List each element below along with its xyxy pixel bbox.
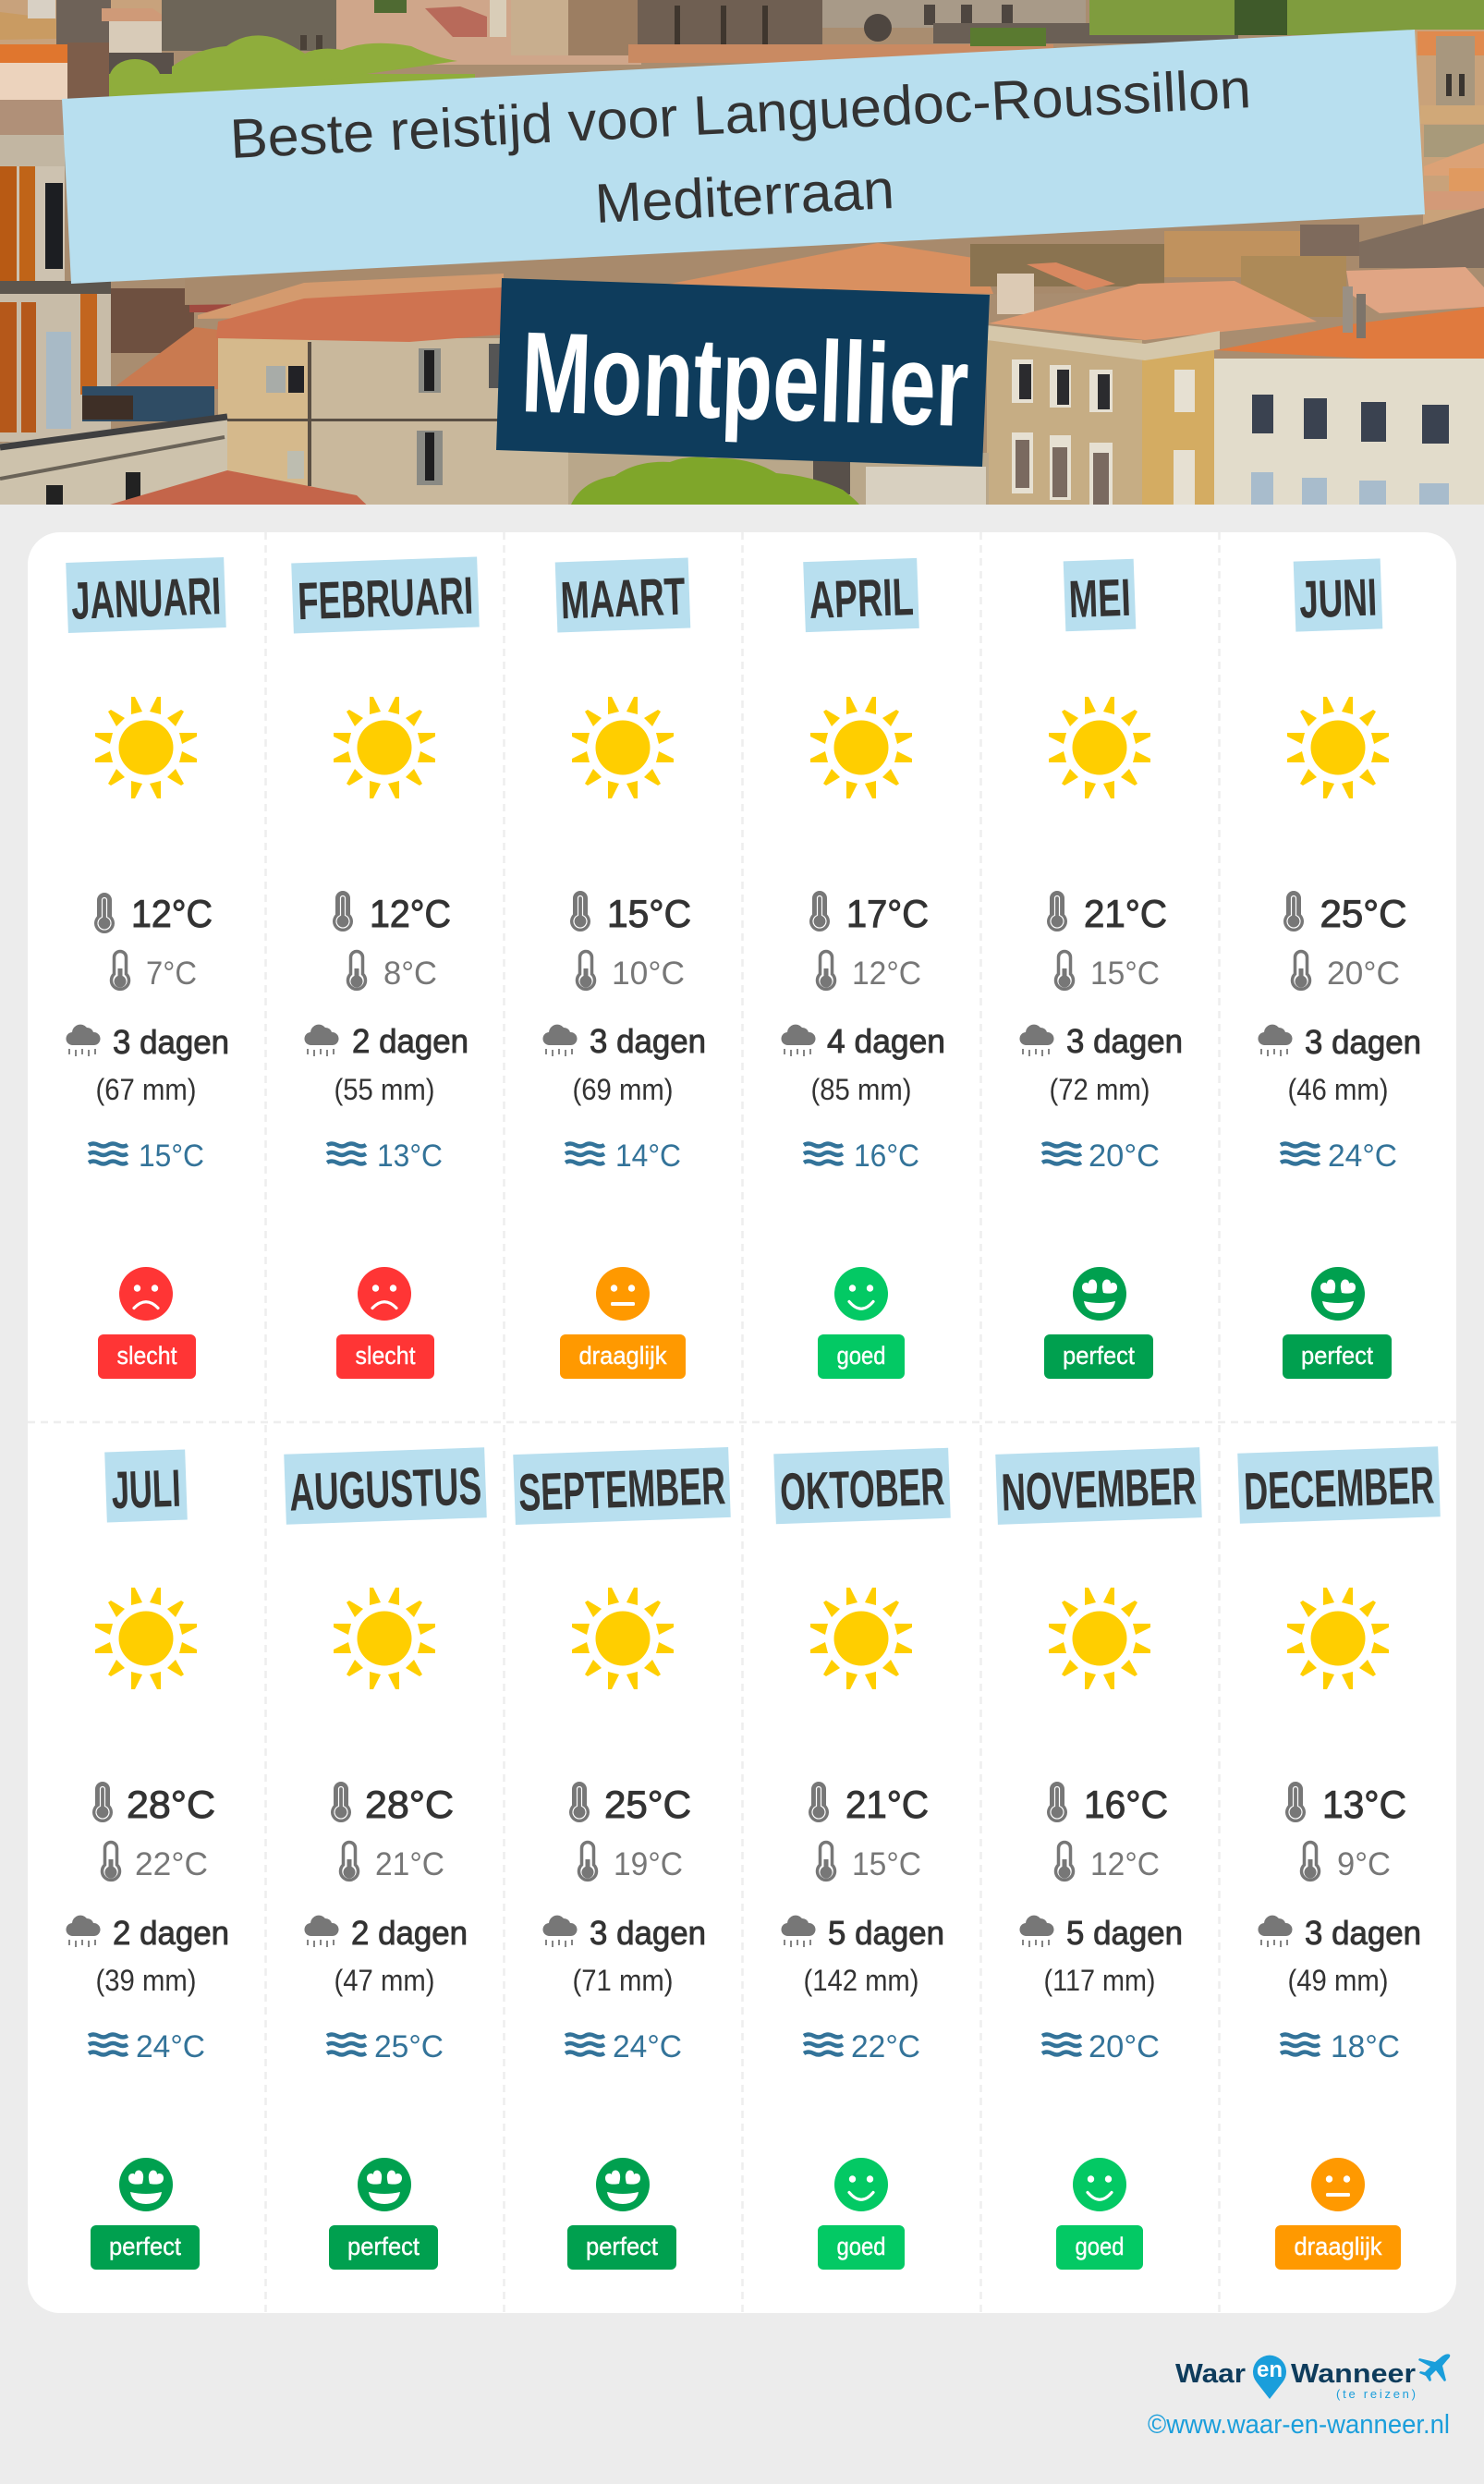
month heading: FEBRUARI [297, 566, 474, 631]
icon: thermometer low [577, 952, 595, 989]
icon: rating face [1311, 2158, 1365, 2211]
sea temperature: 15°C [139, 1138, 204, 1174]
min temperature: 15°C [852, 1846, 921, 1882]
icon: thermometer high [331, 1782, 351, 1822]
rainfall: (69 mm) [573, 1073, 673, 1106]
rating badge: perfect [1301, 1342, 1373, 1370]
icon: thermometer high [92, 1782, 113, 1822]
rating badge: slecht [116, 1342, 177, 1370]
icon: sun [810, 1588, 912, 1689]
icon: waves [1281, 1144, 1320, 1164]
icon: thermometer low [340, 1843, 359, 1880]
sea temperature: 13°C [377, 1138, 443, 1174]
logo: Waar en Wanneer [1175, 2354, 1450, 2401]
website url: ©www.waar-en-wanneer.nl [1148, 2410, 1450, 2440]
month panel: juli [66, 1450, 229, 2270]
icon: sun [572, 1588, 674, 1689]
rating badge: perfect [347, 2233, 420, 2260]
icon: thermometer high [1285, 1782, 1306, 1822]
month heading [513, 1447, 731, 1525]
month panel: oktober [773, 1448, 951, 2270]
rainfall: (142 mm) [804, 1964, 918, 1997]
month heading: SEPTEMBER [517, 1456, 726, 1523]
month panel: september [513, 1447, 731, 2270]
max temperature: 12°C [131, 892, 213, 935]
rating badge [818, 2225, 905, 2270]
month panel: november [995, 1447, 1202, 2270]
month heading [995, 1447, 1202, 1525]
sea temperature: 20°C [1089, 2029, 1160, 2064]
icon: rain cloud [66, 1916, 101, 1947]
max temperature: 13°C [1322, 1783, 1406, 1826]
icon: sun [95, 1588, 197, 1689]
city name: Montpellier [519, 309, 970, 451]
rain days: 3 dagen [113, 1023, 229, 1061]
icon: rain cloud [304, 1916, 339, 1947]
max temperature: 12°C [370, 892, 451, 935]
icon: thermometer low [111, 952, 129, 989]
month panel: april [781, 558, 945, 1379]
month heading: JULI [111, 1459, 182, 1520]
rating badge: draaglijk [1294, 2233, 1382, 2260]
rain days: 3 dagen [590, 1022, 706, 1060]
min temperature: 9°C [1337, 1846, 1391, 1882]
max temperature: 21°C [845, 1783, 929, 1826]
icon: waves [1281, 2035, 1320, 2055]
min temperature: 22°C [135, 1846, 208, 1882]
icon: waves [1042, 2035, 1081, 2055]
icon: waves [89, 2035, 128, 2055]
logo tagline: (te reizen) [1336, 2387, 1416, 2401]
hero photo: Montpellier rooftops [0, 0, 1484, 518]
title text line 2: Mediterraan [593, 158, 895, 235]
icon: plane [1418, 2354, 1450, 2381]
icon: thermometer low [1055, 952, 1074, 989]
rating badge [567, 2225, 676, 2270]
month heading: JUNI [1298, 568, 1378, 629]
sea temperature: 24°C [613, 2029, 682, 2064]
rating badge: perfect [586, 2233, 658, 2260]
icon: thermometer low [347, 952, 366, 989]
month panel: mei [1019, 559, 1183, 1379]
month panel: december [1237, 1446, 1441, 2270]
icon: sun [1049, 1588, 1150, 1689]
min temperature: 7°C [146, 956, 197, 992]
icon: waves [89, 1144, 128, 1164]
icon: thermometer low [1292, 952, 1310, 989]
min temperature: 20°C [1327, 956, 1400, 992]
rating badge: goed [1076, 2233, 1124, 2260]
rainfall: (67 mm) [96, 1073, 196, 1106]
rating badge [91, 2225, 200, 2270]
rating badge [1283, 1334, 1392, 1379]
rating badge [818, 1334, 905, 1379]
max temperature: 21°C [1084, 892, 1167, 935]
icon: rating face [1073, 2158, 1126, 2211]
icon: thermometer low [102, 1843, 120, 1880]
month heading: JANUARI [70, 566, 222, 631]
icon: rating face [119, 1267, 173, 1321]
month heading: APRIL [809, 567, 915, 630]
rating badge [560, 1334, 686, 1379]
icon: thermometer high [569, 1782, 590, 1822]
icon: rating face [358, 1267, 411, 1321]
logo word Waar: Waar [1175, 2359, 1246, 2389]
icon: thermometer low [1301, 1843, 1320, 1880]
icon: waves [804, 1144, 843, 1164]
icon: waves [327, 1144, 366, 1164]
icon: thermometer high [1283, 891, 1304, 932]
icon: map pin [1253, 2356, 1286, 2399]
icon: rating face [834, 1267, 888, 1321]
icon: thermometer high [333, 891, 353, 932]
rain days: 3 dagen [590, 1914, 706, 1952]
sea temperature: 25°C [374, 2029, 444, 2064]
icon: sun [95, 697, 197, 798]
month heading [803, 558, 919, 632]
icon: thermometer high [809, 891, 830, 932]
month heading [291, 557, 480, 633]
rating badge: goed [837, 1342, 885, 1370]
icon: rain cloud [542, 1025, 578, 1056]
rainfall: (39 mm) [96, 1964, 196, 1997]
white card [28, 532, 1456, 2313]
rainfall: (49 mm) [1288, 1964, 1388, 1997]
sea temperature: 24°C [136, 2029, 205, 2064]
icon: rating face [119, 2158, 173, 2211]
min temperature: 12°C [1090, 1846, 1160, 1882]
title text line 1: Beste reistijd voor Languedoc-Roussillon [228, 57, 1252, 170]
rating badge: perfect [109, 2233, 181, 2260]
sea temperature: 24°C [1328, 1138, 1397, 1174]
icon: sun [334, 697, 435, 798]
min temperature: 8°C [383, 956, 437, 992]
icon: thermometer high [94, 893, 115, 933]
rating badge [1275, 2225, 1401, 2270]
icon: sun [334, 1588, 435, 1689]
title banner [62, 30, 1425, 284]
icon: rating face [358, 2158, 411, 2211]
sea temperature: 20°C [1089, 1138, 1160, 1174]
sea temperature: 14°C [615, 1138, 681, 1174]
icon: thermometer low [817, 952, 835, 989]
icon: waves [566, 1144, 604, 1164]
rain days: 5 dagen [828, 1914, 944, 1952]
icon: thermometer low [578, 1843, 597, 1880]
icon: rain cloud [1258, 1025, 1293, 1056]
icon: thermometer high [1047, 891, 1067, 932]
rainfall: (85 mm) [811, 1073, 911, 1106]
icon: rain cloud [781, 1916, 816, 1947]
rain days: 2 dagen [351, 1914, 468, 1952]
icon: sun [810, 697, 912, 798]
icon: rating face [1311, 1267, 1365, 1321]
rain days: 2 dagen [113, 1914, 229, 1952]
max temperature: 28°C [127, 1783, 215, 1826]
rating badge [98, 1334, 196, 1379]
icon: sun [1049, 697, 1150, 798]
min temperature: 12°C [852, 956, 921, 992]
sea temperature: 22°C [851, 2029, 920, 2064]
rating badge [336, 1334, 434, 1379]
month heading: MEI [1068, 568, 1132, 629]
rainfall: (47 mm) [335, 1964, 434, 1997]
month heading [284, 1447, 487, 1525]
icon: rain cloud [1019, 1916, 1054, 1947]
icon: rain cloud [1258, 1916, 1293, 1947]
icon: rain cloud [66, 1025, 101, 1056]
rainfall: (117 mm) [1044, 1964, 1155, 1997]
icon: rating face [596, 1267, 650, 1321]
icon: sun [1287, 697, 1389, 798]
month heading [1064, 559, 1136, 631]
min temperature: 21°C [375, 1846, 444, 1882]
rating badge [1044, 1334, 1153, 1379]
rainfall: (55 mm) [335, 1073, 434, 1106]
rain days: 2 dagen [352, 1022, 468, 1060]
icon: rating face [596, 2158, 650, 2211]
icon: rating face [1073, 1267, 1126, 1321]
icon: rain cloud [781, 1025, 816, 1056]
rating badge [329, 2225, 438, 2270]
rainfall: (46 mm) [1288, 1073, 1388, 1106]
rating badge [1056, 2225, 1143, 2270]
rain days: 4 dagen [827, 1022, 945, 1060]
icon: thermometer low [1055, 1843, 1074, 1880]
max temperature: 25°C [604, 1783, 691, 1826]
rating badge: perfect [1063, 1342, 1135, 1370]
icon: rating face [834, 2158, 888, 2211]
month panel: januari [66, 557, 229, 1379]
rating badge: slecht [355, 1342, 416, 1370]
max temperature: 17°C [846, 892, 929, 935]
rain days: 5 dagen [1066, 1914, 1183, 1952]
rainfall: (72 mm) [1050, 1073, 1149, 1106]
icon: rain cloud [542, 1916, 578, 1947]
rain days: 3 dagen [1305, 1023, 1421, 1061]
rainfall: (71 mm) [573, 1964, 673, 1997]
rain days: 3 dagen [1066, 1022, 1183, 1060]
icon: thermometer high [809, 1782, 829, 1822]
icon: sun [1287, 1588, 1389, 1689]
month heading [555, 558, 690, 632]
month heading [66, 557, 226, 633]
month heading [773, 1448, 951, 1524]
min temperature: 15°C [1090, 956, 1160, 992]
icon: sun [572, 697, 674, 798]
icon: waves [804, 2035, 843, 2055]
rating badge: draaglijk [578, 1342, 667, 1370]
month panel: juni [1258, 558, 1421, 1379]
min temperature: 19°C [614, 1846, 683, 1882]
month panel: februari [291, 557, 480, 1379]
icon: rain cloud [1019, 1025, 1054, 1056]
month panel: maart [542, 558, 706, 1379]
icon: thermometer low [817, 1843, 835, 1880]
icon: rain cloud [304, 1025, 339, 1056]
max temperature: 28°C [365, 1783, 454, 1826]
icon: waves [327, 2035, 366, 2055]
icon: waves [1042, 1144, 1081, 1164]
month heading: AUGUSTUS [288, 1456, 482, 1523]
rating badge: goed [837, 2233, 885, 2260]
icon: thermometer high [570, 891, 590, 932]
icon: waves [566, 2035, 604, 2055]
month heading [104, 1450, 188, 1522]
month heading: NOVEMBER [1001, 1456, 1198, 1523]
max temperature: 25°C [1320, 892, 1406, 935]
max temperature: 15°C [607, 892, 691, 935]
logo word en: en [1257, 2357, 1283, 2382]
month panel: augustus [284, 1447, 487, 2270]
sea temperature: 18°C [1331, 2029, 1400, 2064]
month heading: MAART [560, 567, 687, 630]
max temperature: 16°C [1084, 1783, 1168, 1826]
logo word Wanneer: Wanneer [1291, 2359, 1416, 2389]
sea temperature: 16°C [854, 1138, 919, 1174]
city banner [496, 278, 990, 467]
rain days: 3 dagen [1305, 1914, 1421, 1952]
month heading: OKTOBER [779, 1457, 945, 1522]
month heading [1294, 558, 1382, 632]
min temperature: 10°C [612, 956, 685, 992]
icon: thermometer high [1047, 1782, 1067, 1822]
